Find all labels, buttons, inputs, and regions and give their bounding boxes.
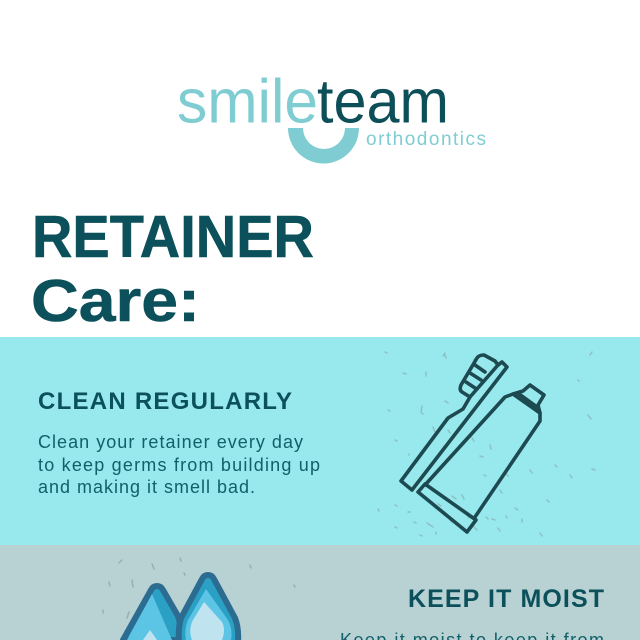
icon: toothbrush xyxy=(401,355,507,490)
logo smile arc xyxy=(288,128,359,164)
icon: toothbrush and toothpaste xyxy=(401,355,544,532)
heading: clean regularly: CLEAN REGULARLY xyxy=(38,388,292,415)
speckles behind toothbrush icon xyxy=(378,352,595,536)
icon: right water drop xyxy=(179,575,238,640)
body text: clean regularly: and making it smell bad. xyxy=(38,477,255,497)
logo orthodontics: orthodontics xyxy=(366,129,486,150)
heading: keep it moist: KEEP IT MOIST xyxy=(408,585,604,613)
panel: clean regularly xyxy=(0,337,640,545)
speckles behind water drops icon xyxy=(103,558,295,618)
title line two: Care: xyxy=(31,268,200,334)
logo wordmark team: team xyxy=(317,68,449,136)
icon: toothpaste tube xyxy=(418,385,544,532)
body text: clean regularly: to keep germs from building up xyxy=(38,455,320,475)
icon: water drops xyxy=(123,575,238,640)
body text: clean regularly: Clean your retainer every day xyxy=(38,432,303,452)
logo: smileteam orthodontics xyxy=(177,68,486,164)
title xyxy=(31,204,314,334)
panel: keep it moist xyxy=(0,545,640,640)
title line one: RETAINER xyxy=(32,204,314,270)
icon: left water drop xyxy=(123,586,185,640)
logo wordmark smile: smile xyxy=(177,68,318,136)
body text: clean regularly xyxy=(38,432,320,497)
